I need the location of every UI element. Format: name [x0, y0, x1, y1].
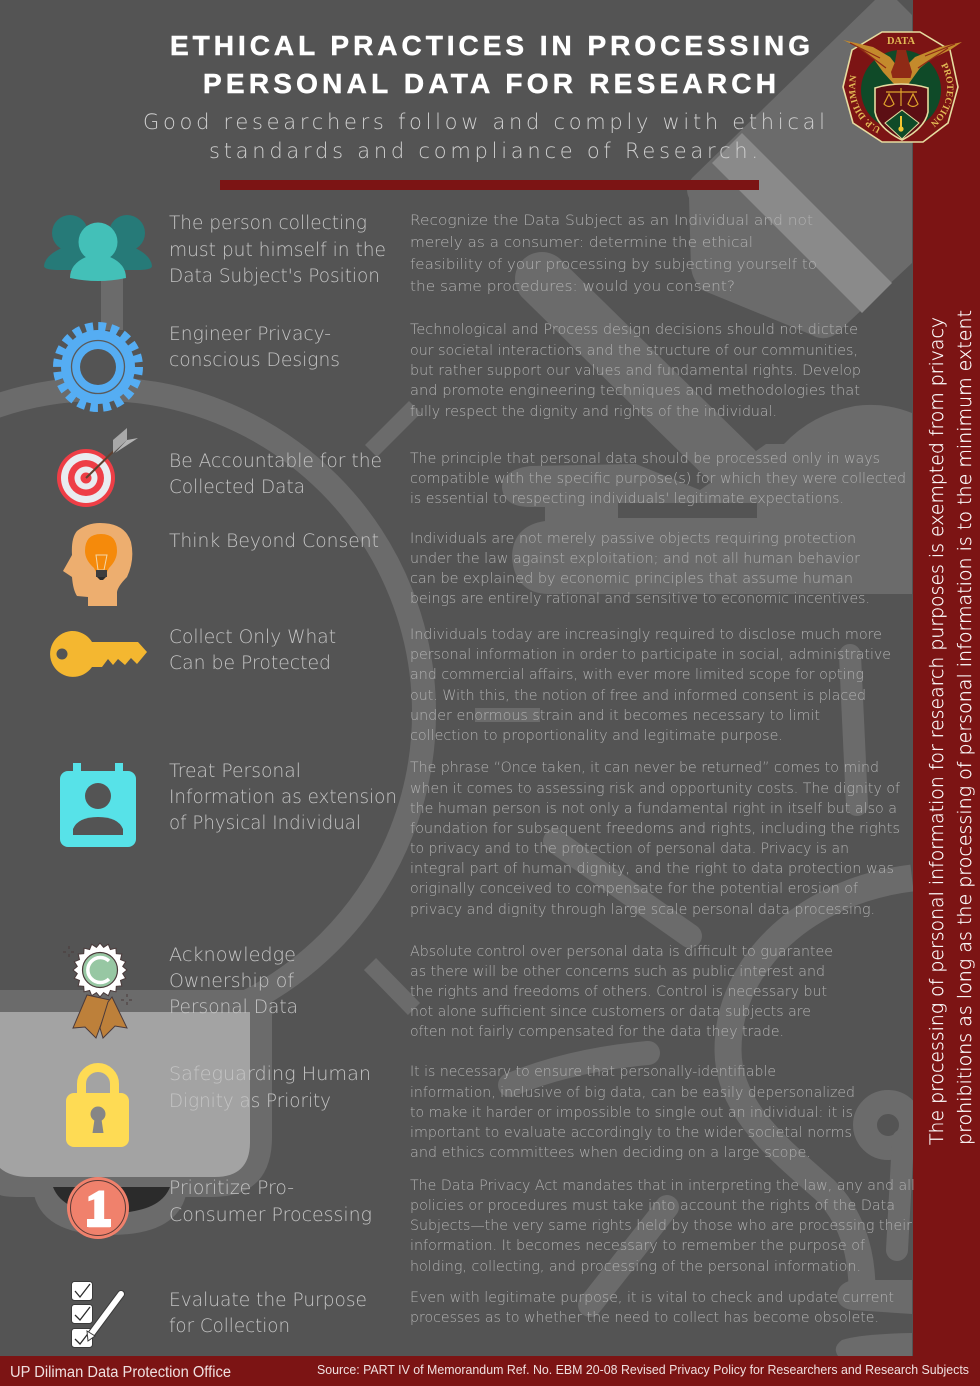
body text 7: often not fairly compensated for the data they trade.: [410, 1024, 784, 1040]
sidebar vertical statement: prohibitions as long as the processing of personal information is to the minimum extent: [954, 310, 976, 1145]
subtitle: Good researchers follow and comply with ethical: [143, 110, 825, 134]
body text 3: compatible with the specific purpose(s) for which they were collected: [410, 471, 906, 487]
shield: [875, 84, 928, 140]
title: [170, 30, 810, 99]
heading 8: [169, 1064, 371, 1112]
body text 7: the rights and freedoms of others. Control is necessary but: [410, 984, 827, 1000]
body text 9: policies or procedures must take into account the rights of the Data: [410, 1198, 895, 1214]
heading 4: Think Beyond Consent: [169, 531, 379, 552]
icon: number one badge: 1: [86, 1181, 112, 1238]
body text 3: The principle that personal data should be processed only in ways: [410, 451, 880, 467]
heading 6: Treat Personal: [169, 761, 301, 782]
body text 8: and ethics committees when deciding on a large scope.: [410, 1145, 811, 1161]
title: ETHICAL PRACTICES IN PROCESSING: [170, 30, 810, 61]
body text 9: [410, 1178, 915, 1275]
body text 5: Individuals today are increasingly required to disclose much more: [410, 627, 882, 643]
body text 10: Even with legitimate purpose, it is vital to check and update current: [410, 1290, 894, 1306]
body text 8: It is necessary to ensure that personally-identifiable: [410, 1064, 776, 1080]
heading 1: [169, 213, 386, 287]
body text 2: our societal interactions and the structure of our communities,: [410, 343, 858, 359]
body text 4: beings are entirely rational and sensitive to economic incentives.: [410, 591, 870, 607]
heading 6: Information as extension: [169, 787, 397, 808]
heading 10: Evaluate the Purpose: [169, 1290, 367, 1311]
sidebar vertical statement: The processing of personal information for research purposes is exempted from privacy: [926, 317, 948, 1145]
sidebar vertical statement: [926, 310, 976, 1145]
title divider bar: [220, 180, 759, 190]
body text 8: information, inclusive of big data, can be easily depersonalized: [410, 1085, 855, 1101]
heading 5: [169, 627, 336, 674]
body text 5: under enormous strain and it becomes necessary to limit: [410, 708, 820, 724]
logo: UP Diliman Data Protection seal: U.P. DILIMAN: [848, 74, 880, 134]
subtitle: [143, 110, 825, 163]
body text 2: [410, 322, 861, 420]
body text 1: the same procedures: would you consent?: [410, 279, 735, 295]
body text 9: information. It becomes necessary to remember the purpose of: [410, 1238, 865, 1254]
body text 7: [410, 944, 833, 1040]
body text 6: privacy and dignity through large scale personal data processing.: [410, 902, 875, 918]
heading 1: must put himself in the: [169, 240, 386, 261]
body text 1: [410, 213, 817, 295]
body text 9: Subjects—the very same rights held by those who are processing their: [410, 1218, 912, 1234]
heading 3: Collected Data: [169, 477, 305, 498]
body text 6: foundation for subsequent freedoms and rights, including the rights: [410, 821, 900, 837]
body text 7: as there will be other concerns such as public interest and: [410, 964, 825, 980]
body text 8: to make it harder or impossible to single out an individual: it is: [410, 1105, 853, 1121]
heading 5: Can be Protected: [169, 653, 331, 674]
body text 6: integral part of human dignity, and the right to data protection was: [410, 861, 894, 877]
icon: contact card: [60, 763, 136, 847]
body text 8: [410, 1064, 855, 1161]
heading 1: Data Subject's Position: [169, 266, 380, 287]
body text 1: feasibility of your processing by subjecting yourself to: [410, 257, 817, 273]
subtitle: standards and compliance of Research.: [209, 139, 758, 163]
logo: UP Diliman Data Protection seal: [842, 31, 962, 143]
icon: number one badge: [67, 1177, 129, 1239]
body text 5: and commercial affairs, with ever more limited scope for opting: [410, 667, 864, 683]
body text 9: holding, collecting, and processing of the personal information.: [410, 1259, 861, 1275]
heading 7: [169, 945, 298, 1018]
body text 2: fully respect the dignity and rights of the individual.: [410, 404, 777, 420]
body text 5: collection to proportionality and legitimate purpose.: [410, 728, 783, 744]
icon: yellow padlock: [66, 1068, 129, 1147]
icon: people group: [44, 215, 152, 281]
body text 7: not alone sufficient since customers or data subjects are: [410, 1004, 811, 1020]
body text 1: merely as a consumer: determine the ethical: [410, 235, 753, 251]
scales and key: [884, 88, 918, 132]
body text 10: [410, 1290, 894, 1326]
body text 6: the human person is not only a fundamental right in itself but also a: [410, 801, 897, 817]
heading 8: Dignity as Priority: [169, 1091, 331, 1112]
body text 10: processes as to whether the need to collect has become obsolete.: [410, 1310, 879, 1326]
body text 7: Absolute control over personal data is difficult to guarantee: [410, 944, 833, 960]
heading 3: [169, 451, 382, 498]
body text 6: originally conceived to compensate for the potential erosion of: [410, 881, 858, 897]
icon: checklist and pen: [72, 1282, 121, 1348]
heading 6: of Physical Individual: [169, 813, 361, 834]
body text 2: Technological and Process design decisions should not dictate: [410, 322, 858, 338]
heading 6: [169, 761, 397, 834]
body text 2: and promote engineering techniques and methodologies that: [410, 383, 860, 399]
body text 4: under the law against exploitation; and not all human behavior: [410, 551, 860, 567]
icon: copyright award ribbon: [63, 943, 133, 1038]
logo: UP Diliman Data Protection seal: PROTECTION: [931, 62, 954, 128]
body text 6: to privacy and to the protection of personal data. Privacy is an: [410, 841, 849, 857]
heading 10: [169, 1290, 367, 1337]
heading 7: Ownership of: [169, 971, 294, 992]
body text 6: The phrase “Once taken, it can never be returned” comes to mind: [410, 760, 879, 776]
heading 9: Prioritize Pro-: [169, 1178, 294, 1199]
body text 6: [410, 760, 900, 918]
heading 7: Personal Data: [169, 997, 298, 1018]
title: PERSONAL DATA FOR RESEARCH: [203, 68, 776, 99]
body text 2: but rather support our values and fundamental rights. Develop: [410, 363, 861, 379]
icon: blue gear: [58, 326, 138, 408]
icon: yellow key: [50, 631, 147, 677]
heading 5: Collect Only What: [169, 627, 336, 648]
heading 3: Be Accountable for the: [169, 451, 382, 472]
body text 3: is essential to respecting individuals' legitimate expectations.: [410, 491, 844, 507]
body text 9: The Data Privacy Act mandates that in interpreting the law, any and all: [410, 1178, 915, 1194]
heading 2: [169, 324, 340, 371]
heading 9: Consumer Processing: [169, 1205, 372, 1226]
heading 9: [169, 1178, 372, 1226]
body text 8: important to evaluate accordingly to the wider societal norms: [410, 1125, 852, 1141]
footer office name: UP Diliman Data Protection Office: [10, 1364, 231, 1381]
body text 5: personal information in order to participate in social, administrative: [410, 647, 891, 663]
heading 7: Acknowledge: [169, 945, 296, 966]
body text 4: Individuals are not merely passive objects requiring protection: [410, 531, 856, 547]
heading 8: Safeguarding Human: [169, 1064, 371, 1085]
body text 4: can be explained by economic principles that assume human: [410, 571, 853, 587]
icon: target with arrow: [57, 428, 138, 507]
body text 3: [410, 451, 906, 507]
heading 10: for Collection: [169, 1316, 290, 1337]
icon: head with light bulb: [63, 523, 132, 606]
heading 2: Engineer Privacy-: [169, 324, 331, 345]
heading 1: The person collecting: [169, 213, 367, 234]
logo: UP Diliman Data Protection seal: DATA: [887, 35, 915, 47]
body text 6: when it comes to assessing risk and opportunity costs. The dignity of: [410, 781, 900, 797]
body text 4: [410, 531, 870, 607]
body text 1: Recognize the Data Subject as an Individual and not: [410, 213, 813, 229]
eagle wings and body: [843, 40, 962, 90]
heading 2: conscious Designs: [169, 350, 340, 371]
body text 5: [410, 627, 891, 744]
body text 5: out. With this, the notion of free and informed consent is placed: [410, 688, 866, 704]
